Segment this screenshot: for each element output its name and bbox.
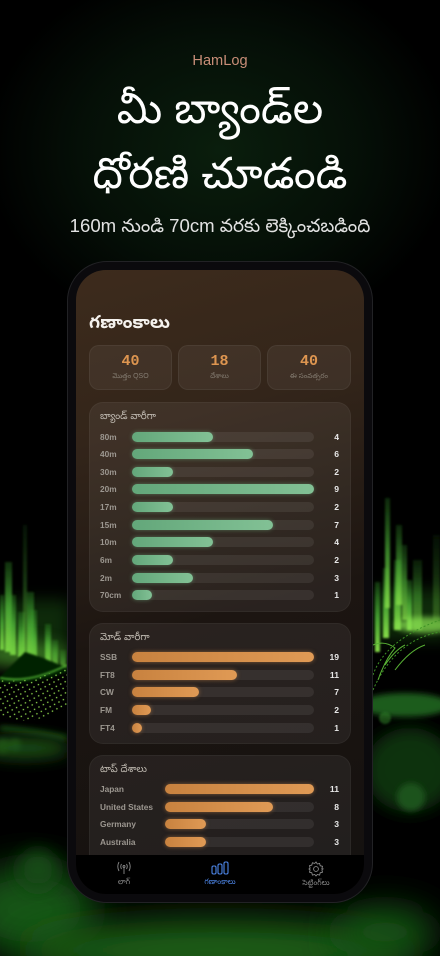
row CW: 7 bbox=[334, 687, 339, 697]
stat card: countries bbox=[178, 345, 261, 390]
row 10m: 4 bbox=[334, 537, 339, 547]
tab bar bbox=[76, 855, 364, 894]
icon: bar chart bbox=[211, 862, 229, 874]
row 20m bbox=[100, 482, 339, 496]
top countries title: టాప్ దేశాలు bbox=[100, 764, 147, 775]
row 2m: 3 bbox=[334, 573, 339, 583]
icon: antenna bbox=[117, 862, 131, 874]
row CW bbox=[100, 684, 339, 700]
row 20m: 20m bbox=[100, 484, 117, 494]
row 80m: 80m bbox=[100, 432, 117, 442]
row FM: 2 bbox=[334, 705, 339, 715]
headline bbox=[93, 85, 347, 198]
row 2m bbox=[100, 570, 339, 586]
row 30m bbox=[100, 464, 339, 480]
row FT4: 1 bbox=[334, 723, 339, 733]
row 80m: 4 bbox=[334, 432, 339, 442]
row 17m: 17m bbox=[100, 502, 117, 512]
row 17m bbox=[100, 500, 339, 514]
stat card: total QSO: మొత్తం QSO bbox=[112, 373, 149, 380]
row United States: 8 bbox=[334, 802, 339, 812]
row SSB bbox=[100, 649, 339, 665]
stat card: this year: ఈ సంవత్సరం bbox=[290, 373, 328, 380]
row 6m: 6m bbox=[100, 555, 112, 565]
row 10m: 10m bbox=[100, 537, 117, 547]
headline: ధోరణి చూడండి bbox=[93, 150, 347, 198]
stat card: countries: 18 bbox=[210, 353, 228, 370]
headline: మీ బ్యాండ్‌ల bbox=[117, 85, 323, 133]
row United States: United States bbox=[100, 802, 153, 812]
screen heading: గణాంకాలు bbox=[89, 312, 170, 332]
row 40m bbox=[100, 446, 339, 462]
row 6m bbox=[100, 552, 339, 568]
subtitle: 160m నుండి 70cm వరకు లెక్కించబడింది bbox=[70, 215, 370, 236]
row Germany: 3 bbox=[334, 819, 339, 829]
stat card: countries: దేశాలు bbox=[210, 373, 229, 380]
row 15m: 7 bbox=[334, 520, 339, 530]
row FT8 bbox=[100, 667, 339, 683]
row FT8: 11 bbox=[330, 670, 339, 680]
stat card: this year: 40 bbox=[300, 353, 318, 370]
row CW: CW bbox=[100, 687, 114, 697]
row 20m: 9 bbox=[334, 484, 339, 494]
phone mockup bbox=[67, 261, 373, 903]
row Japan bbox=[100, 781, 339, 797]
row 15m bbox=[100, 518, 339, 532]
row 40m: 6 bbox=[334, 449, 339, 459]
row 6m: 2 bbox=[334, 555, 339, 565]
brand label: HamLog bbox=[192, 53, 248, 69]
row SSB: 19 bbox=[329, 652, 339, 662]
by mode title: మోడ్ వారీగా bbox=[100, 632, 150, 643]
row 15m: 15m bbox=[100, 520, 117, 530]
row FT4 bbox=[100, 720, 339, 736]
row 40m: 40m bbox=[100, 449, 117, 459]
tab: stats, active bbox=[204, 862, 236, 886]
by band title: బ్యాండ్ వారీగా bbox=[100, 411, 156, 422]
row Australia: 3 bbox=[334, 837, 339, 847]
tab: stats, active: గణాంకాలు bbox=[204, 877, 236, 886]
tab: log bbox=[117, 862, 131, 886]
row Germany bbox=[100, 816, 339, 832]
row Japan: Japan bbox=[100, 784, 124, 794]
row 80m bbox=[100, 430, 339, 444]
row FT8: FT8 bbox=[100, 670, 115, 680]
row SSB: SSB bbox=[100, 652, 117, 662]
row 17m: 2 bbox=[334, 502, 339, 512]
row Japan: 11 bbox=[330, 784, 339, 794]
tab: settings: సెట్టింగ్‌లు bbox=[302, 878, 330, 887]
row United States bbox=[100, 799, 339, 815]
row Germany: Germany bbox=[100, 819, 136, 829]
row Australia bbox=[100, 834, 339, 850]
row FM bbox=[100, 702, 339, 718]
stat card: this year bbox=[267, 345, 351, 390]
row FT4: FT4 bbox=[100, 723, 115, 733]
stat card: total QSO bbox=[89, 345, 172, 390]
row 30m: 2 bbox=[334, 467, 339, 477]
tab: settings bbox=[302, 861, 330, 888]
tab: log: లాగ్ bbox=[118, 877, 130, 886]
row 70cm: 70cm bbox=[100, 590, 121, 600]
row 70cm bbox=[100, 588, 339, 602]
row 30m: 30m bbox=[100, 467, 117, 477]
app screen bbox=[76, 270, 364, 894]
row 2m: 2m bbox=[100, 573, 112, 583]
row Australia: Australia bbox=[100, 837, 136, 847]
row 10m bbox=[100, 534, 339, 550]
row FM: FM bbox=[100, 705, 112, 715]
stat card: total QSO: 40 bbox=[121, 353, 140, 370]
row 70cm: 1 bbox=[334, 590, 339, 600]
icon: gear bbox=[308, 861, 324, 876]
